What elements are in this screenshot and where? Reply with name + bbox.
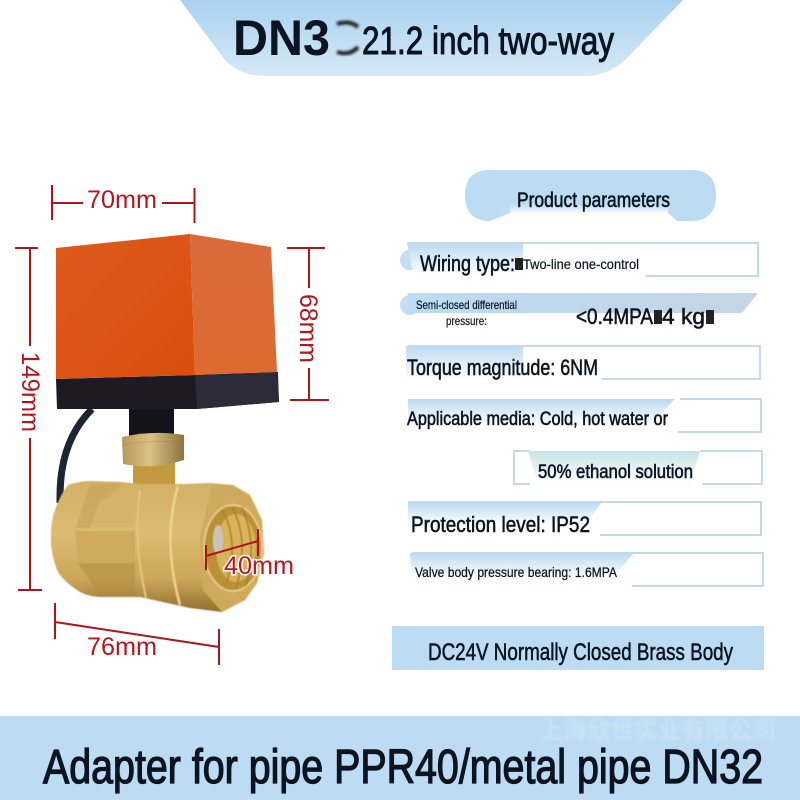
row: semi-closed differential pressure: Semi-closed differential [416,298,517,312]
row: protection level: Protection level: IP52 [411,512,590,537]
dimension: 68mm height [287,248,329,400]
actuator base [56,372,279,409]
actuator orange cover side [190,234,277,375]
dimension: 76mm length: 76mm [87,633,157,661]
row: semi-closed differential pressure: 4 kg [662,304,705,329]
dimension: 40mm bore [206,529,294,580]
heading pill: product parameters: Product parameters [517,189,670,212]
dimension: 76mm length [55,603,219,665]
row: torque magnitude [406,346,760,380]
threaded opening [204,505,262,591]
knurled nut [122,433,184,466]
brass body [51,481,264,612]
row: semi-closed differential pressure: pressure: [446,314,487,328]
row: semi-closed differential pressure [400,293,758,329]
dimension: 70mm width [52,185,195,223]
actuator orange cover front [56,234,195,379]
row: torque magnitude: Torque magnitude: 6NM [407,355,598,380]
body details [76,484,122,528]
heading pill: product parameters [465,170,716,221]
row: wiring type: Wiring type: [420,251,515,276]
valve neck [133,462,175,493]
dimension: 70mm width: 70mm [87,186,157,214]
dimension: 149mm height: 149mm [16,352,44,432]
row: valve body pressure: Valve body pressure bearing: 1.6MPA [415,564,618,580]
dimension: 68mm height: 68mm [294,294,322,363]
hex face [200,484,264,612]
row: applicable media: Applicable media: Cold, hot water or [407,409,669,430]
row: applicable media [407,399,761,432]
footer band [0,711,800,800]
title: DN3: DN3 [233,10,330,66]
product photo: electric ball valve [51,234,279,612]
actuator stem [129,407,174,439]
title: size text: 21.2 inch two-way [362,20,614,63]
row: ethanol solution: 50% ethanol solution [538,462,693,483]
cable [60,409,92,503]
row: wiring type [400,243,758,276]
dimension: 40mm bore: 40mm [224,552,294,580]
row: ethanol solution [514,451,762,484]
row: wiring type: Two-line one-control [523,256,639,272]
row: valve body pressure [410,553,763,586]
blurred smudge [337,23,358,53]
row: semi-closed differential pressure: <0.4MPA [576,304,653,329]
title banner [180,0,683,76]
dimension: 149mm height [15,248,44,590]
faint watermark: 上海欣世实业有限公司 [540,711,776,745]
row: protection level [408,502,761,537]
product label band [392,626,764,670]
